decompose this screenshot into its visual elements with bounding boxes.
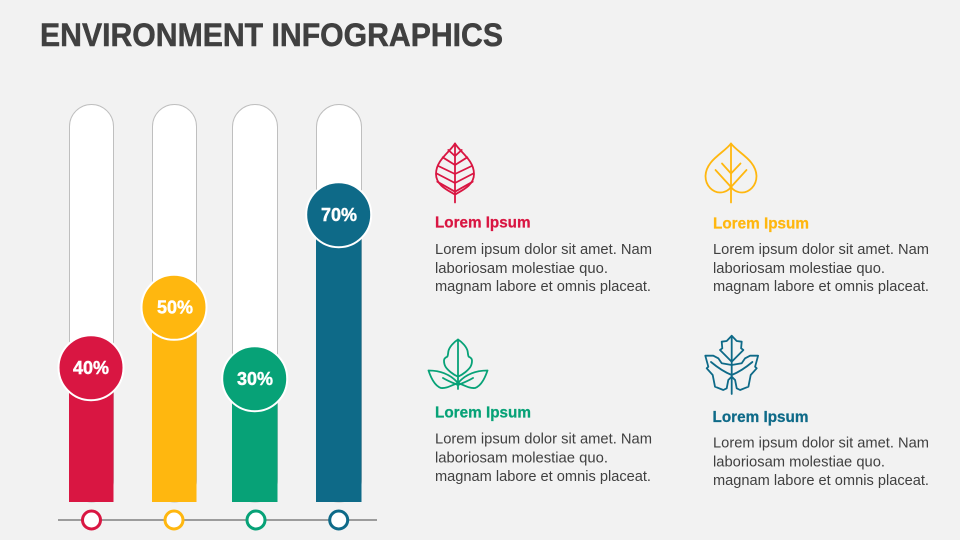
heading: Lorem Ipsum bbox=[712, 409, 808, 426]
axis with markers bbox=[58, 511, 377, 529]
bar: 50% bbox=[142, 104, 206, 502]
body text: laboriosam molestiae quo. bbox=[435, 450, 608, 466]
bar: 50%: 50% bbox=[157, 298, 193, 318]
body text: laboriosam molestiae quo. bbox=[435, 260, 608, 277]
icon: blue maple leaf bbox=[705, 336, 758, 394]
bar: 70%: 70% bbox=[321, 205, 357, 225]
panel: red leaf item bbox=[435, 144, 652, 295]
body text: magnam labore et omnis placeat. bbox=[435, 278, 651, 295]
body text: Lorem ipsum dolor sit amet. Nam bbox=[435, 241, 652, 258]
heading: Lorem Ipsum bbox=[713, 216, 809, 233]
body text: magnam labore et omnis placeat. bbox=[713, 472, 929, 489]
body text: magnam labore et omnis placeat. bbox=[435, 468, 651, 485]
body text: laboriosam molestiae quo. bbox=[713, 260, 885, 277]
title: ENVIRONMENT INFOGRAPHICS bbox=[40, 17, 503, 53]
icon: yellow leaf bbox=[706, 144, 756, 202]
heading: Lorem Ipsum bbox=[435, 215, 530, 232]
bar: 30% bbox=[222, 104, 287, 502]
body text bbox=[435, 430, 652, 485]
body text: laboriosam molestiae quo. bbox=[713, 454, 885, 470]
heading: Lorem Ipsum bbox=[435, 404, 531, 422]
body text: Lorem ipsum dolor sit amet. Nam bbox=[713, 435, 929, 452]
body text: Lorem ipsum dolor sit amet. Nam bbox=[435, 430, 652, 448]
icon: green leaf bbox=[428, 340, 488, 389]
panel: blue leaf item bbox=[705, 336, 929, 489]
body text bbox=[435, 241, 652, 295]
body text: magnam labore et omnis placeat. bbox=[713, 278, 929, 295]
panel: green leaf item bbox=[428, 340, 652, 485]
bar: 40%: 40% bbox=[73, 358, 109, 378]
bar: 30%: 30% bbox=[237, 369, 273, 389]
body text bbox=[713, 241, 929, 295]
bar: 70% bbox=[306, 104, 371, 502]
body text: Lorem ipsum dolor sit amet. Nam bbox=[713, 241, 929, 258]
bar: 40% bbox=[58, 104, 124, 502]
icon: red leaf bbox=[436, 144, 474, 202]
body text bbox=[713, 435, 929, 489]
panel: yellow leaf item bbox=[706, 144, 929, 295]
bar chart bbox=[58, 104, 371, 502]
